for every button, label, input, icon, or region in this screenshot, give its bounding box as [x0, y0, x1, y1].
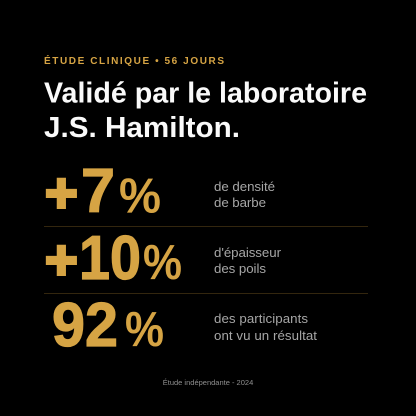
stat row: 92%: des participants: [214, 311, 308, 326]
title: Validé par le laboratoire: [44, 78, 367, 110]
eyebrow label: ÉTUDE CLINIQUE • 56 JOURS: [44, 54, 224, 67]
stat row: +7%: [45, 157, 275, 226]
stat row: +10%: %: [143, 236, 182, 290]
title: [44, 78, 367, 144]
title: J.S. Hamilton.: [44, 112, 240, 144]
stat row: +7%: +: [45, 161, 78, 224]
stat row: +10%: 10: [79, 224, 141, 293]
stat row: +10%: [45, 224, 282, 293]
stat row: +7%: de barbe: [214, 195, 266, 210]
stat row: 92%: %: [125, 303, 164, 357]
stat row: +10%: des poils: [214, 261, 266, 276]
stat row: +7%: %: [119, 170, 161, 224]
footer note: Étude indépendante - 2024: [163, 378, 253, 387]
stat row: +10%: d'épaisseur: [214, 245, 282, 260]
stat row: 92%: [52, 291, 317, 360]
stat row: 92%: 92: [52, 291, 118, 360]
stat row: +10%: +: [45, 228, 78, 291]
stat row: +7%: de densité: [214, 179, 275, 194]
stat row: 92%: ont vu un résultat: [214, 328, 317, 343]
stat row: +7%: 7: [81, 157, 115, 226]
